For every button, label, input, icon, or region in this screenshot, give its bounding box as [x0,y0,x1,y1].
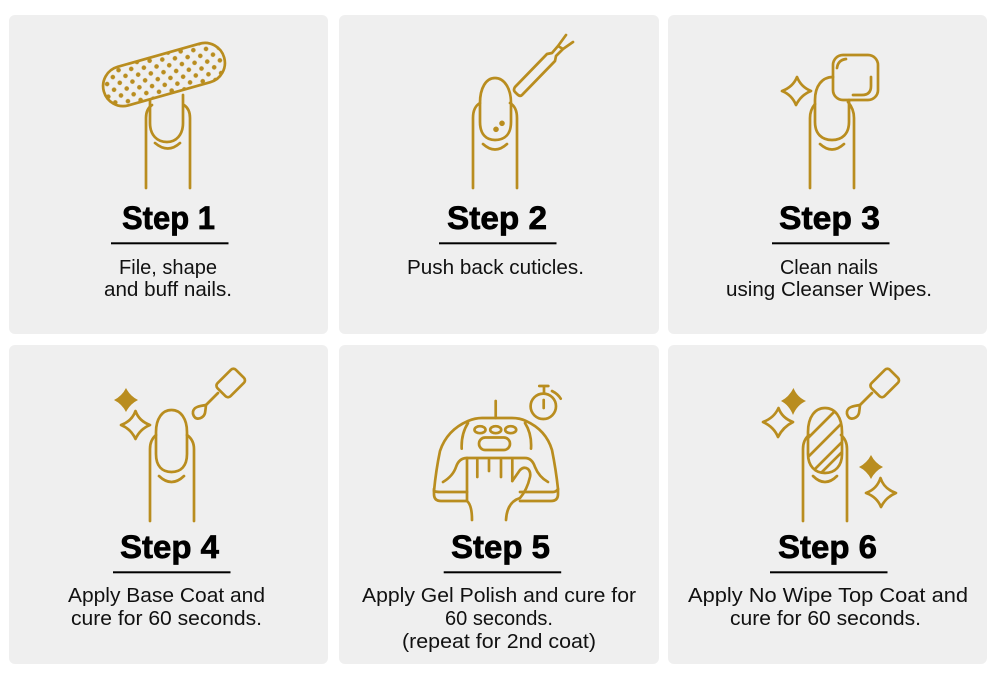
heading: Step 6: Step 6 [778,529,877,565]
icon: base coat brush and finger [114,367,246,521]
text: step 1 description: and buff nails. [104,278,232,301]
text: step 5 description [362,584,636,653]
text: step 4 description: Apply Base Coat and [68,584,265,607]
panel: step 1 [9,15,328,334]
text: step 1 description [104,256,232,301]
text: step 3 description: Clean nails [780,256,878,279]
panel: step 5 [339,345,659,664]
text: step 5 description: 60 seconds. [445,607,553,630]
text: step 3 description [726,256,932,301]
text: step 3 description: using Cleanser Wipes. [726,278,932,301]
icon: curing lamp with hand and timer [434,386,561,520]
text: step 6 description [688,584,968,630]
text: step 6 description: Apply No Wipe Top Coat and [688,584,968,607]
text: step 5 description: (repeat for 2nd coat) [402,630,596,653]
text: step 5 description: Apply Gel Polish and cure for [362,584,636,607]
panel: step 4 [9,345,328,664]
icon: cleanser wipe on finger [782,55,878,188]
icon: nail file on finger [98,38,230,188]
heading: Step 4: Step 4 [120,529,219,565]
text: step 1 description: File, shape [119,256,217,279]
panel: step 3 [668,15,987,334]
heading: Step 2: Step 2 [447,200,547,236]
heading: Step 3: Step 3 [779,200,880,236]
text: step 6 description: cure for 60 seconds. [730,607,921,630]
heading: Step 1: Step 1 [122,200,215,236]
icon: cuticle pusher and finger [473,35,573,188]
text: step 2 description: Push back cuticles. [407,256,584,279]
panel: step 6 [668,345,987,664]
icon: top coat brush, striped nail and sparkles [763,367,900,521]
text: step 4 description: cure for 60 seconds. [71,607,262,630]
heading: Step 5: Step 5 [451,529,550,565]
text: step 4 description [68,584,265,630]
panel: step 2 [339,15,659,334]
